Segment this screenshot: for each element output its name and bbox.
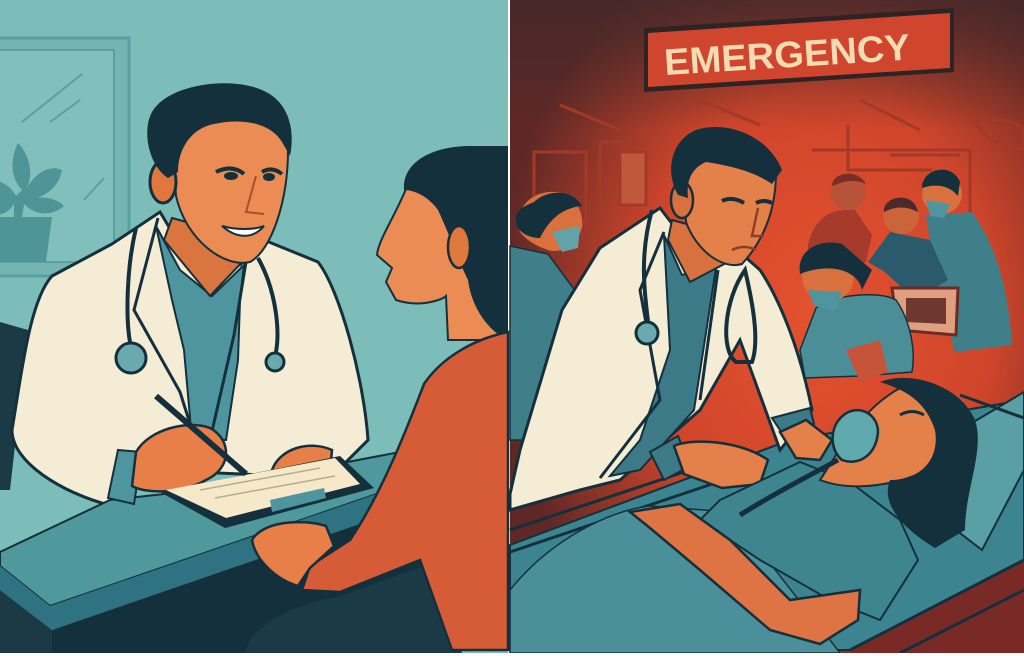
folded hands <box>252 522 334 586</box>
lap <box>245 560 462 653</box>
nurse far left <box>510 246 582 440</box>
blanket <box>510 506 840 653</box>
background equipment <box>534 100 1024 250</box>
coat sleeve cuffs and hands <box>650 436 690 480</box>
orange top <box>302 332 508 650</box>
scrubs <box>610 235 716 476</box>
hair <box>671 127 782 198</box>
stretcher bed <box>510 392 1024 653</box>
hair <box>147 83 292 178</box>
gown <box>700 462 918 620</box>
hair <box>880 378 978 548</box>
bottom white strip <box>0 653 1024 656</box>
chair <box>0 322 28 490</box>
stethoscope <box>128 228 277 352</box>
shirt <box>156 226 244 440</box>
emergency sign: EMERGENCY <box>663 27 911 83</box>
pen <box>156 396 246 474</box>
arm <box>630 504 860 644</box>
nurse centre <box>800 295 913 378</box>
clipboard and paper <box>160 456 374 528</box>
oxygen mask <box>833 410 878 462</box>
coat <box>510 208 812 510</box>
face <box>684 150 776 265</box>
face <box>172 110 288 263</box>
panel: emergency room <box>510 0 1024 653</box>
doctor: consulting <box>0 83 368 506</box>
doctor: treating <box>510 127 832 510</box>
background staff <box>510 170 1012 440</box>
emergency sign <box>644 8 954 92</box>
desk <box>0 452 440 653</box>
patient on bed <box>510 378 978 653</box>
face and neck <box>820 388 938 486</box>
panel: calm consultation <box>0 0 508 653</box>
far-back figure <box>808 210 872 262</box>
back of neck and face <box>377 170 500 340</box>
doctor's hands <box>108 425 332 504</box>
patient <box>245 146 508 653</box>
nurse centre-back <box>868 232 948 300</box>
hair <box>404 146 508 340</box>
neck <box>164 218 246 296</box>
monitor <box>892 288 958 335</box>
window with plant <box>0 38 129 276</box>
nurse right <box>926 212 1012 352</box>
white coat <box>12 212 368 506</box>
neck <box>668 220 728 282</box>
